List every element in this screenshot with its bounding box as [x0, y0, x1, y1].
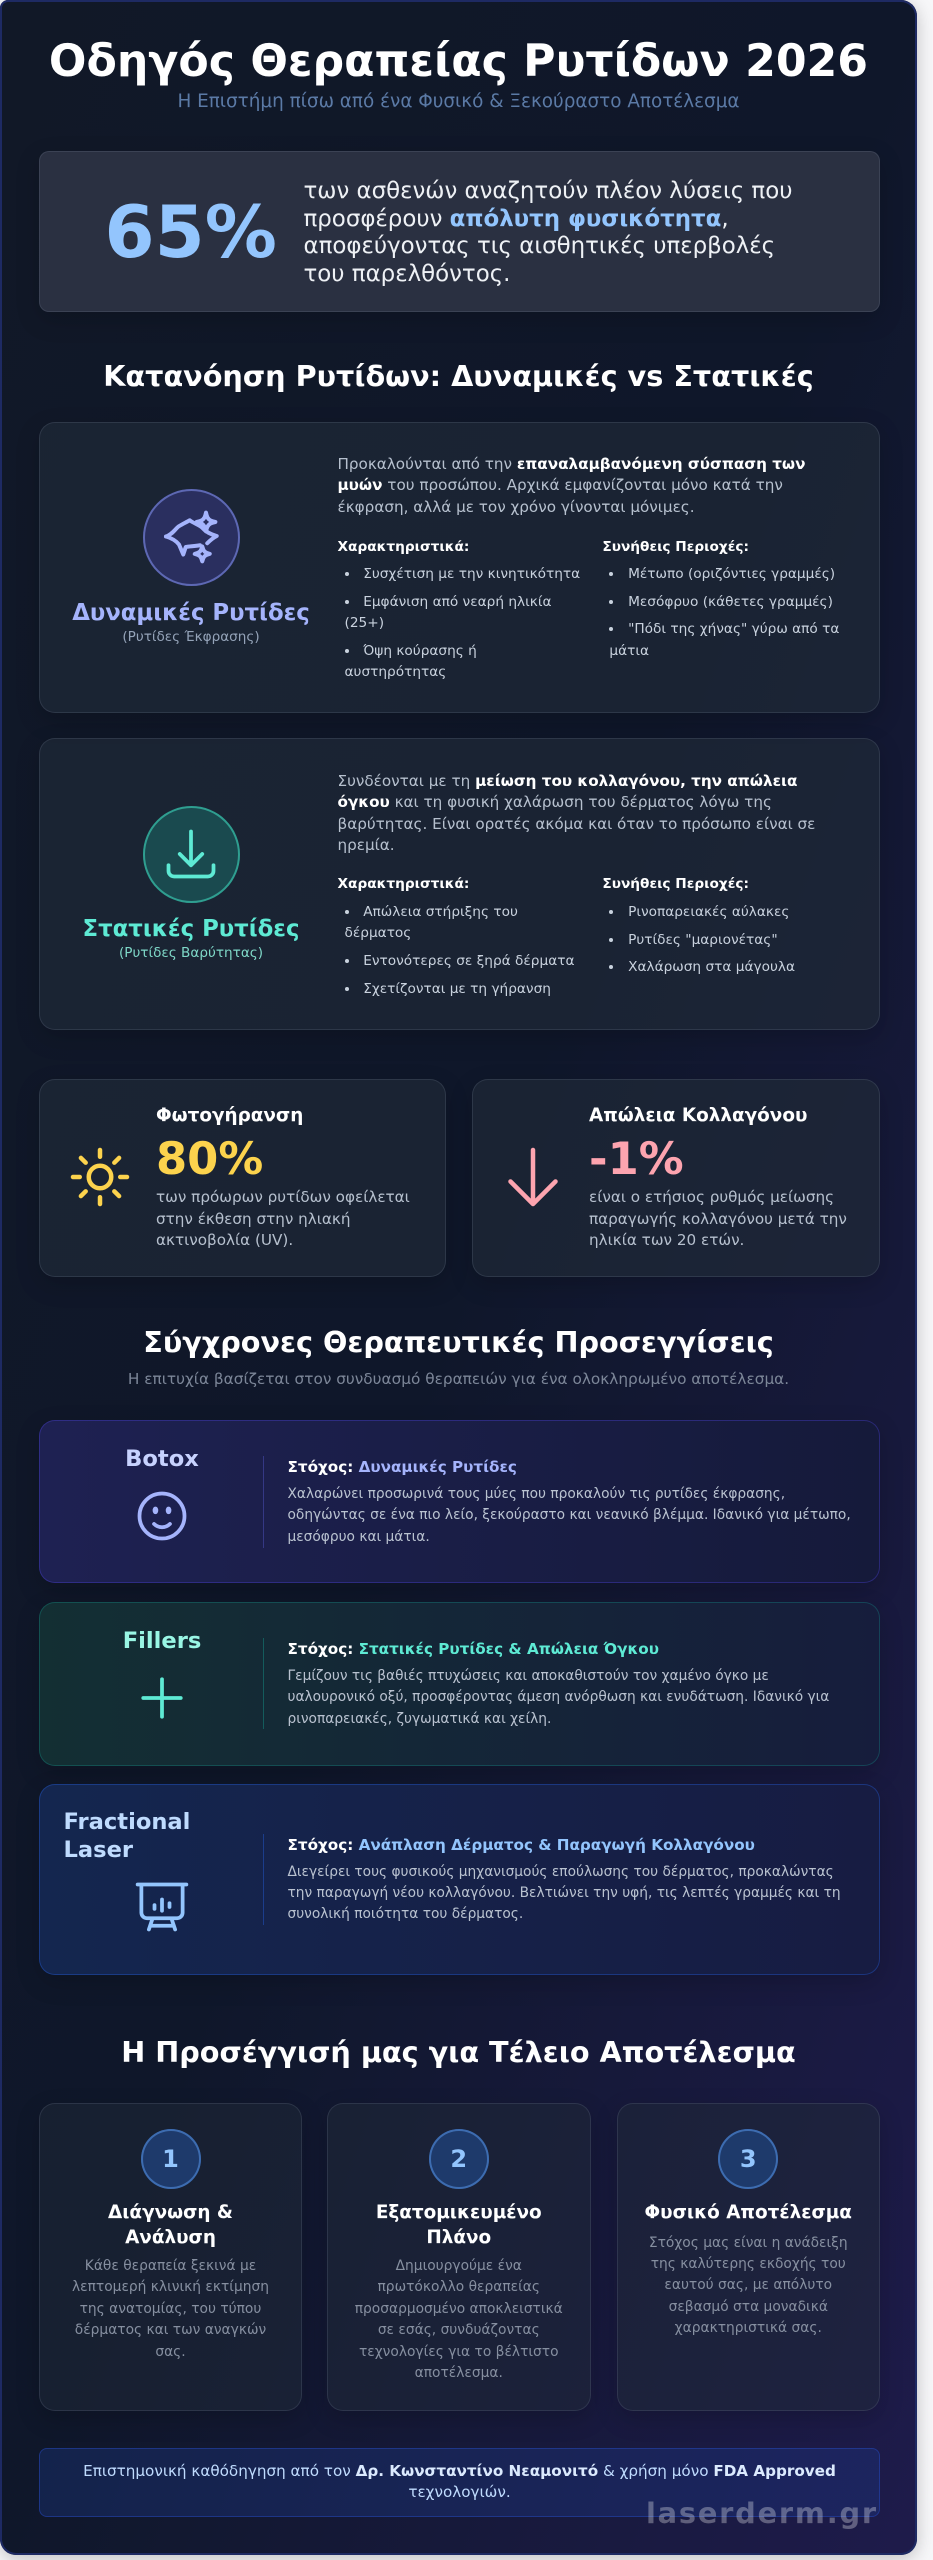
hero text	[304, 178, 792, 287]
subtitle: Η Επιστήμη πίσω από ένα Φυσικό & Ξεκούραστο Αποτέλεσμα	[177, 91, 740, 112]
icon: arrow down	[508, 1148, 558, 1206]
panel: static wrinkles	[39, 738, 880, 1030]
title: Οδηγός Θεραπείας Ρυτίδων 2026	[49, 36, 868, 87]
characteristics list: Εμφάνιση από νεαρή ηλικία	[363, 594, 551, 610]
step text	[72, 2258, 269, 2360]
dynamic description: Προκαλούνται από την επαναλαμβανόμενη σύσπαση των	[338, 454, 805, 472]
stat description	[156, 1188, 410, 1249]
panel: footer note	[39, 2448, 880, 2517]
dynamic description: έκφραση, αλλά με τον χρόνο γίνονται μόνιμες.	[338, 498, 695, 516]
laser description: την παραγωγή νέου κολλαγόνου. Βελτιώνει την υφή, τις λεπτές γραμμές και τη	[288, 1885, 841, 1901]
step text	[355, 2258, 563, 2381]
laser name: Laser	[64, 1837, 133, 1863]
divider	[262, 1456, 264, 1548]
heading: understanding wrinkles: Κατανόηση Ρυτίδων: Δυναμικές vs Στατικές	[103, 358, 814, 392]
static description: βαρύτητας. Είναι ορατές ακόμα και όταν το πρόσωπο είναι σε	[338, 814, 815, 832]
characteristics list: Συσχέτιση με την κινητικότητα	[363, 566, 580, 582]
icon: arrow down tray in circle	[142, 806, 240, 902]
characteristics list	[344, 904, 574, 997]
characteristics list: δέρματος	[344, 925, 411, 941]
panel: step 3	[616, 2103, 880, 2411]
common areas list	[609, 904, 795, 975]
characteristics list: Όψη κούρασης ή	[363, 643, 477, 659]
botox description	[288, 1486, 851, 1545]
step title	[108, 2202, 233, 2248]
stat description: ακτινοβολία (UV).	[156, 1231, 293, 1249]
watermark: laserderm.gr	[646, 2496, 878, 2530]
panel: photoaging stat	[39, 1079, 446, 1277]
stat description: είναι ο ετήσιος ρυθμός μείωσης	[589, 1188, 834, 1206]
static description: Συνδέονται με τη μείωση του κολλαγόνου, την απώλεια	[338, 772, 797, 790]
dynamic description	[338, 454, 805, 516]
divider	[262, 1638, 264, 1729]
static description	[338, 772, 815, 854]
stat description: στην έκθεση στην ηλιακή	[156, 1210, 350, 1228]
characteristics heading: Χαρακτηριστικά:	[338, 538, 469, 554]
stat description	[589, 1188, 847, 1249]
heading: our approach: Η Προσέγγισή μας για Τέλειο Αποτέλεσμα	[121, 2034, 796, 2068]
fillers description	[288, 1668, 829, 1727]
panel: botox	[39, 1420, 880, 1583]
step text	[649, 2234, 848, 2336]
botox description: οδηγώντας σε ένα πιο λείο, ξεκούραστο και νεανικό βλέμμα. Ιδανικό για μέτωπο,	[288, 1507, 851, 1523]
heading: modern approaches: Σύγχρονες Θεραπευτικές Προσεγγίσεις	[143, 1324, 774, 1358]
dynamic description: μυών του προσώπου. Αρχικά εμφανίζονται μόνο κατά την	[338, 476, 783, 494]
characteristics list: Σχετίζονται με τη γήρανση	[363, 981, 551, 997]
footer text: Επιστημονική καθόδηγηση από τον Δρ. Κωνσταντίνο Νεαμονιτό & χρήση μόνο FDA Approved	[83, 2462, 836, 2480]
panel: fractional laser	[39, 1784, 880, 1975]
botox description: Χαλαρώνει προσωρινά τους μύες που προκαλούν τις ρυτίδες έκφρασης,	[288, 1486, 785, 1502]
step title	[376, 2202, 542, 2248]
characteristics list: Εντονότερες σε ξηρά δέρματα	[363, 953, 574, 969]
common areas list: μάτια	[609, 643, 649, 659]
stat description: παραγωγής κολλαγόνου μετά την	[589, 1210, 847, 1228]
static title: Στατικές Ρυτίδες	[83, 916, 299, 942]
common areas list: Χαλάρωση στα μάγουλα	[628, 959, 795, 975]
common areas list: Ρινοπαρειακές αύλακες	[628, 904, 789, 920]
fillers name: Fillers	[123, 1628, 201, 1654]
laser name: Fractional	[64, 1809, 190, 1835]
step number 2: 2	[450, 2145, 467, 2173]
step title: Διάγνωση &	[108, 2202, 233, 2223]
icon: plus	[141, 1677, 183, 1719]
step text: λεπτομερή κλινική εκτίμηση	[72, 2279, 269, 2295]
step text: Στόχος μας είναι η ανάδειξη	[649, 2234, 848, 2250]
common areas list: Μέτωπο (οριζόντιες γραμμές)	[628, 566, 835, 582]
common areas heading: Συνήθεις Περιοχές:	[602, 538, 749, 554]
stat title: Φωτογήρανση	[156, 1104, 303, 1126]
stat description: των πρόωρων ρυτίδων οφείλεται	[156, 1188, 410, 1206]
panel: fillers	[39, 1602, 880, 1766]
step title: Φυσικό Αποτέλεσμα	[645, 2202, 852, 2223]
stat description: ηλικία των 20 ετών.	[589, 1231, 744, 1249]
common areas heading: Συνήθεις Περιοχές:	[602, 876, 749, 892]
panel: collagen loss stat	[472, 1079, 880, 1277]
botox description: μεσόφρυο και μάτια.	[288, 1529, 430, 1545]
icon: presentation chart	[136, 1882, 188, 1932]
step number 1	[140, 2129, 200, 2189]
footer text: τεχνολογιών.	[408, 2483, 511, 2501]
botox name: Botox	[125, 1446, 199, 1472]
hero number 65%: 65%	[104, 190, 277, 274]
step text: εαυτού σας, με απόλυτο	[664, 2277, 832, 2293]
common areas list: "Πόδι της χήνας" γύρω από τα	[628, 621, 839, 637]
step text: πρωτόκολλο θεραπείας	[378, 2279, 540, 2295]
approaches subtitle: Η επιτυχία βασίζεται στον συνδυασμό θεραπειών για ένα ολοκληρωμένο αποτέλεσμα.	[128, 1370, 789, 1388]
common areas list: Ρυτίδες "μαριονέτας"	[628, 932, 778, 948]
characteristics list	[344, 566, 580, 680]
step text: σας.	[155, 2344, 186, 2360]
icon: sun	[70, 1148, 130, 1206]
dynamic title: Δυναμικές Ρυτίδες	[72, 600, 310, 626]
laser description: συνολική ποιότητα του δέρματος.	[288, 1906, 523, 1922]
step title: Ανάλυση	[125, 2227, 216, 2248]
characteristics list: (25+)	[344, 615, 384, 631]
step text: αποτέλεσμα.	[415, 2365, 503, 2381]
dynamic subtitle: (Ρυτίδες Έκφρασης)	[122, 629, 260, 645]
laser name	[64, 1809, 190, 1863]
fillers description: υαλουρονικό οξύ, προσφέροντας άμεση ανόρθωση και ενυδάτωση. Ιδανικό για	[288, 1689, 829, 1705]
step text: τεχνολογίες για το βέλτιστο	[359, 2344, 559, 2360]
step title: Πλάνο	[426, 2227, 491, 2248]
panel: hero statistic	[39, 151, 880, 312]
laser description	[288, 1864, 841, 1922]
step text: προσαρμοσμένο αποκλειστικά	[355, 2301, 563, 2317]
step text: της ανατομίας, του τύπου	[80, 2301, 261, 2317]
icon: smiling face	[138, 1492, 186, 1540]
step text: σεβασμό στα μοναδικά	[669, 2299, 828, 2315]
step text: σε εσάς, συνδυάζοντας	[378, 2322, 540, 2338]
step text: Κάθε θεραπεία ξεκινά με	[85, 2258, 256, 2274]
step text: χαρακτηριστικά σας.	[675, 2320, 822, 2336]
common areas list: Μεσόφρυο (κάθετες γραμμές)	[628, 594, 833, 610]
laser description: Διεγείρει τους φυσικούς μηχανισμούς επούλωσης του δέρματος, προκαλώντας	[288, 1864, 834, 1880]
static description: ηρεμία.	[338, 836, 395, 854]
fillers description: ρινοπαρειακές, ζυγωματικά και χείλη.	[288, 1711, 551, 1727]
panel: step 2	[327, 2103, 590, 2411]
step text: Δημιουργούμε ένα	[396, 2258, 522, 2274]
footer text	[83, 2462, 836, 2501]
laser target: Στόχος: Ανάπλαση Δέρματος & Παραγωγή Κολλαγόνου	[288, 1836, 755, 1854]
stat number -1%: -1%	[589, 1132, 684, 1185]
stat number 80%: 80%	[156, 1132, 263, 1185]
panel: dynamic wrinkles	[39, 422, 880, 713]
hero text: προσφέρουν απόλυτη φυσικότητα,	[304, 206, 729, 232]
hero text: αποφεύγοντας τις αισθητικές υπερβολές	[304, 233, 775, 259]
characteristics list: αυστηρότητας	[344, 664, 446, 680]
static description: όγκου και τη φυσική χαλάρωση του δέρματος λόγω της	[338, 793, 772, 811]
step title: Εξατομικευμένο	[376, 2202, 542, 2223]
icon: sparkles in circle	[142, 488, 240, 586]
hero text: του παρελθόντος.	[304, 261, 510, 287]
botox target: Στόχος: Δυναμικές Ρυτίδες	[288, 1458, 517, 1476]
step text: δέρματος και των αναγκών	[75, 2322, 266, 2338]
characteristics heading: Χαρακτηριστικά:	[338, 876, 469, 892]
step number 2	[429, 2129, 489, 2189]
stat title: Απώλεια Κολλαγόνου	[589, 1104, 807, 1126]
fillers description: Γεμίζουν τις βαθιές πτυχώσεις και αποκαθιστούν τον χαμένο όγκο με	[288, 1668, 769, 1684]
step number 3: 3	[740, 2145, 757, 2173]
step text: της καλύτερης εκδοχής του	[651, 2256, 846, 2272]
fillers target: Στόχος: Στατικές Ρυτίδες & Απώλεια Όγκου	[288, 1640, 659, 1658]
divider	[262, 1834, 264, 1925]
common areas list	[609, 566, 839, 659]
panel: step 1	[39, 2103, 302, 2411]
static subtitle: (Ρυτίδες Βαρύτητας)	[119, 945, 263, 961]
step number 3	[718, 2129, 778, 2189]
characteristics list: Απώλεια στήριξης του	[363, 904, 518, 920]
hero text: των ασθενών αναζητούν πλέον λύσεις που	[304, 178, 792, 204]
step number 1: 1	[162, 2145, 179, 2173]
